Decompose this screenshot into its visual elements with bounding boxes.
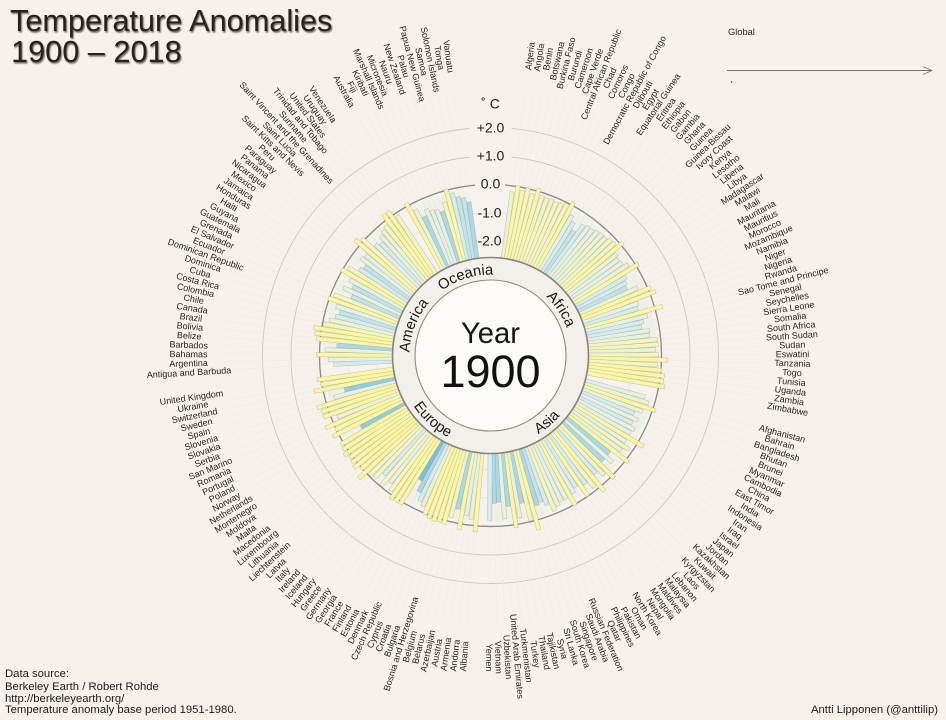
Asia bars and country labels: Oman xyxy=(629,605,650,631)
Asia bars and country labels: Tajikistan xyxy=(545,632,562,670)
Oceania bars and country labels: Solomon Islands xyxy=(419,26,442,94)
global data point xyxy=(731,81,732,83)
Oceania bars and country labels: Tonga xyxy=(432,45,446,71)
Africa bars and country labels: Madagascar xyxy=(719,171,766,207)
Asia bars and country labels: North Korea xyxy=(630,590,664,637)
data source note: http://berkeleyearth.org/ xyxy=(5,693,125,705)
Africa bars and country labels: Zambia xyxy=(774,393,805,407)
Africa bars and country labels: Guinea xyxy=(688,125,715,153)
axis labels: 0.0 xyxy=(481,176,500,192)
Africa bars and country labels: Lesotho xyxy=(710,153,742,180)
Europe bars and country labels: Estonia xyxy=(338,607,361,638)
Africa bars and country labels: Democratic Republic of Congo xyxy=(601,34,668,146)
Europe bars and country labels: Bulgaria xyxy=(382,624,402,658)
Europe bars and country labels: Bosnia and Herzegovina xyxy=(382,596,420,692)
Africa bars and country labels: Mauritania xyxy=(736,198,777,227)
axis labels: -2.0 xyxy=(477,232,502,248)
Africa bars and country labels: Uganda xyxy=(774,384,807,398)
Europe bars and country labels: Cyprus xyxy=(365,619,385,650)
central hub ring xyxy=(392,258,588,454)
Asia bars and country labels xyxy=(484,366,806,700)
Europe bars and country labels: Iceland xyxy=(283,573,310,601)
America bars and country labels: Ecuador xyxy=(192,235,226,257)
Africa bars and country labels: Angola xyxy=(532,43,546,72)
Europe bars and country labels: Norway xyxy=(211,490,243,514)
Africa bars and country labels: Botswana xyxy=(548,41,566,81)
Europe bars and country labels: United Kingdom xyxy=(159,388,224,407)
Africa bars and country labels: South Africa xyxy=(766,319,816,334)
America bars and country labels: Nicaragua xyxy=(230,157,269,190)
America bars and country labels: Antigua and Barbuda xyxy=(146,365,231,380)
America bars and country labels: Grenada xyxy=(198,217,234,241)
Africa bars and country labels: Morocco xyxy=(747,217,783,241)
global timeline arrow xyxy=(727,66,932,74)
Africa bars and country labels: Tanzania xyxy=(774,358,811,369)
Asia bars and country labels: Bhutan xyxy=(759,450,789,470)
Africa bars and country labels: Ghana xyxy=(682,119,707,146)
Europe bars and country labels: Slovenia xyxy=(183,433,219,452)
Africa bars and country labels: Djibouti xyxy=(631,79,655,110)
America bars and country labels: Honduras xyxy=(214,182,253,211)
Asia bars and country labels: Indonesia xyxy=(726,503,764,532)
Africa bars and country labels: Benin xyxy=(541,47,555,71)
Africa bars and country labels: Namibia xyxy=(755,235,789,257)
Africa bars and country labels: Seychelles xyxy=(765,290,810,308)
America bars and country labels: Belize xyxy=(177,330,202,342)
America bars and country labels: Saint Lucia xyxy=(261,120,299,159)
Asia bars and country labels: Pakistan xyxy=(619,605,644,640)
Europe bars and country labels: Denmark xyxy=(346,608,371,646)
America bars and country labels: Canada xyxy=(176,301,209,316)
Asia bars and country labels: Saudi Arabia xyxy=(584,612,611,664)
Oceania bars and country labels: Samoa xyxy=(413,47,429,77)
America bars and country labels: Saint Kitts and Nevis xyxy=(240,113,307,178)
Europe bars and country labels: Montenegro xyxy=(213,501,259,535)
Oceania bars and country labels: Nauru xyxy=(377,59,395,85)
Europe bars and country labels: Finland xyxy=(330,603,353,634)
Africa bars and country labels: Somalia xyxy=(773,310,807,324)
Africa bars and country labels: Mali xyxy=(742,196,762,213)
America bars and country labels: Mexico xyxy=(229,169,258,194)
Asia bars and country labels: Bahrain xyxy=(763,433,796,452)
Asia bars and country labels: Qatar xyxy=(605,619,624,643)
Africa bars and country labels: Ivory Coast xyxy=(694,133,735,171)
America bars and country labels: Barbados xyxy=(169,339,209,351)
Europe bars and country labels: Azerbaijan xyxy=(418,629,437,673)
label: Africa: Africa xyxy=(546,292,573,328)
Africa bars and country labels: Sudan xyxy=(779,340,805,350)
America bars and country labels: Panama xyxy=(239,152,271,181)
Africa bars and country labels: Central African Republic xyxy=(579,27,624,121)
Oceania bars and country labels xyxy=(331,25,488,309)
America bars and country labels: Bahamas xyxy=(169,349,208,359)
year value: 1900 xyxy=(440,346,541,397)
Asia bars and country labels: Israel xyxy=(718,530,741,551)
Asia bars and country labels: Singapore xyxy=(577,620,600,662)
Europe bars and country labels: Hungary xyxy=(289,576,318,609)
America bars and country labels: Colombia xyxy=(176,281,215,299)
America bars and country labels: Haiti xyxy=(219,196,239,213)
Asia bars and country labels: Kyrgyzstan xyxy=(679,555,717,594)
Asia bars and country labels: South Korea xyxy=(568,619,592,669)
Africa bars and country labels: Congo xyxy=(616,72,637,100)
Africa bars and country labels: Eritrea xyxy=(654,96,678,123)
Europe bars and country labels: Greece xyxy=(298,583,324,613)
Europe bars and country labels: Liechtenstein xyxy=(247,540,292,583)
Asia bars and country labels: Japan xyxy=(711,536,736,559)
Africa bars and country labels: Eswatini xyxy=(776,349,809,359)
America bars and country labels: Venezuela xyxy=(307,84,339,125)
Asia bars and country labels: China xyxy=(746,484,772,504)
Asia bars and country labels: Uzbekistan xyxy=(501,635,514,680)
Africa bars and country labels: South Sudan xyxy=(766,329,818,342)
title xyxy=(10,3,332,69)
label: Oceania: Oceania xyxy=(438,264,494,289)
Europe bars and country labels: Poland xyxy=(207,483,237,505)
label: Asia: Asia xyxy=(536,412,560,434)
Africa bars and country labels: Zimbabwe xyxy=(766,401,809,418)
Europe bars and country labels: Lithuania xyxy=(246,539,280,570)
Asia bars and country labels: Laos xyxy=(681,570,702,592)
title: Temperature Anomalies xyxy=(10,3,332,38)
Oceania bars and country labels: Fiji xyxy=(345,80,359,94)
Africa bars and country labels: Sao Tome and Principe xyxy=(737,265,829,297)
America bars and country labels: Dominica xyxy=(183,253,222,274)
Asia bars and country labels: Jordan xyxy=(704,542,731,567)
Oceania bars and country labels: Kiribati xyxy=(350,68,371,97)
America bars and country labels: Argentina xyxy=(169,358,208,369)
Europe bars and country labels: Belarus xyxy=(410,632,427,665)
Asia bars and country labels: United Arab Emirates xyxy=(508,614,526,700)
Asia bars and country labels: Sri Lanka xyxy=(561,627,581,666)
Africa bars and country labels: Comoros xyxy=(606,63,631,100)
Africa bars and country labels: Malawi xyxy=(733,185,762,208)
Oceania bars and country labels: Palau xyxy=(395,54,412,79)
author credit: Antti Lipponen (@anttilip) xyxy=(811,704,938,716)
America bars and country labels: Paraguay xyxy=(243,143,279,176)
Africa bars and country labels: Mauritius xyxy=(742,208,780,233)
Oceania bars and country labels: Vanuatu xyxy=(441,39,456,73)
Asia bars and country labels: India xyxy=(739,501,761,519)
Africa bars and country labels: Egypt xyxy=(640,87,661,112)
America bars and country labels: Suriname xyxy=(277,109,310,145)
Europe bars and country labels: Moldova xyxy=(224,512,258,539)
Oceania bars and country labels: Papua New Guinea xyxy=(397,25,427,103)
Asia bars and country labels: Vietnam xyxy=(493,641,504,674)
Europe bars and country labels: Romania xyxy=(196,465,233,489)
Europe bars and country labels: Czech Republic xyxy=(349,600,384,662)
Africa bars and country labels: Niger xyxy=(763,246,787,263)
Africa bars and country labels: Gabon xyxy=(668,107,693,134)
America bars and country labels: Chile xyxy=(183,292,205,306)
Asia bars and country labels: Philippines xyxy=(609,605,637,649)
Asia bars and country labels: Turkey xyxy=(528,640,542,669)
Europe bars and country labels: Slovakia xyxy=(186,441,222,461)
America bars and country labels: Jamaica xyxy=(222,175,255,202)
Europe bars and country labels: Ukraine xyxy=(177,399,209,414)
Europe bars and country labels: Belgium xyxy=(401,630,419,664)
Europe bars and country labels: Andorra xyxy=(448,639,462,672)
Europe bars and country labels: Armenia xyxy=(438,637,453,671)
Asia bars and country labels: Yemen xyxy=(484,644,494,671)
Africa bars and country labels: Mozambique xyxy=(743,223,794,252)
Europe bars and country labels: Macedonia xyxy=(231,523,272,558)
Africa bars and country labels: Libya xyxy=(725,171,749,191)
Asia bars and country labels: Cambodia xyxy=(742,472,784,499)
Africa bars and country labels: Burundi xyxy=(566,49,584,82)
Europe bars and country labels: Netherlands xyxy=(208,493,255,527)
Europe bars and country labels: Malta xyxy=(234,522,258,544)
Africa bars and country labels: Kenya xyxy=(707,147,733,171)
axis labels: +2.0 xyxy=(477,120,505,136)
title: 1900 – 2018 xyxy=(11,34,182,69)
Europe bars and country labels: Austria xyxy=(429,638,444,667)
Europe bars and country labels: Albania xyxy=(458,641,470,672)
Oceania bars and country labels: Micronesia xyxy=(365,53,390,98)
America bars and country labels: Bolivia xyxy=(176,320,204,333)
Asia bars and country labels: Bangladesh xyxy=(753,439,801,464)
Asia bars and country labels: Brunei xyxy=(757,459,784,478)
Asia bars and country labels: Iraq xyxy=(726,524,744,542)
America bars and country labels: Saint Vincent and the Grenadines xyxy=(237,80,336,186)
Europe bars and country labels: Germany xyxy=(304,585,333,622)
data source note: Data source: xyxy=(5,668,69,680)
Africa bars and country labels: Sierra Leone xyxy=(763,299,815,317)
America bars and country labels: Guatemala xyxy=(198,206,242,235)
data source note: Temperature anomaly base period 1951-1980. xyxy=(5,704,237,716)
Asia bars and country labels: Malaysia xyxy=(663,576,692,610)
America bars and country labels xyxy=(146,80,457,380)
label: America: America xyxy=(400,300,429,352)
Asia bars and country labels: Kuwait xyxy=(692,555,718,582)
Asia bars and country labels: Lebanon xyxy=(670,570,700,603)
America bars and country labels: El Salvador xyxy=(189,224,236,251)
Europe bars and country labels: Spain xyxy=(186,426,211,441)
Europe bars and country labels: Latvia xyxy=(264,556,288,580)
Europe bars and country labels: Sweden xyxy=(180,416,214,433)
axis labels xyxy=(477,96,505,248)
Asia bars and country labels: Turkmenistan xyxy=(518,628,534,683)
Europe bars and country labels: France xyxy=(322,599,345,628)
Africa bars and country labels: Senegal xyxy=(768,282,803,299)
Asia bars and country labels: Afghanistan xyxy=(758,423,806,445)
Asia bars and country labels: Syria xyxy=(555,638,570,660)
Africa bars and country labels: Algeria xyxy=(523,42,537,71)
Asia bars and country labels: East Timor xyxy=(733,487,776,517)
America bars and country labels: Brazil xyxy=(179,311,203,324)
radial chart xyxy=(146,25,829,700)
Asia bars and country labels: Thailand xyxy=(536,635,552,671)
Africa bars and country labels: Guinea-Bissau xyxy=(683,122,732,170)
Europe bars and country labels: Switzerland xyxy=(171,406,218,425)
America bars and country labels: Peru xyxy=(257,142,277,163)
Europe bars and country labels xyxy=(159,361,489,692)
America bars and country labels: Trinidad and Tobago xyxy=(271,86,330,156)
Europe bars and country labels: Serbia xyxy=(193,451,221,469)
Europe bars and country labels: Croatia xyxy=(374,623,393,653)
data source note xyxy=(5,668,237,716)
label: Europe: Europe xyxy=(414,400,450,436)
Europe bars and country labels: Luxembourg xyxy=(235,528,280,567)
America bars and country labels: Guyana xyxy=(208,201,241,224)
Africa bars and country labels: Liberia xyxy=(718,162,745,186)
Africa bars and country labels: Ethiopia xyxy=(659,99,687,131)
Africa bars and country labels: Cameroon xyxy=(573,47,595,90)
Asia bars and country labels: Kazakhstan xyxy=(691,542,732,581)
Africa bars and country labels: Equatorial Guinea xyxy=(634,72,682,137)
year caption: Year xyxy=(461,317,520,350)
Asia bars and country labels: Nepal xyxy=(644,596,666,621)
Africa bars and country labels: Cape Verde xyxy=(580,47,605,95)
Asia bars and country labels: Myanmar xyxy=(748,465,786,489)
Asia bars and country labels: Mongolia xyxy=(648,586,677,621)
America bars and country labels: Cuba xyxy=(188,264,212,280)
Africa bars and country labels: Burkina Faso xyxy=(555,36,578,90)
Africa bars and country labels: Tunisia xyxy=(777,376,806,388)
chart rings xyxy=(262,118,718,584)
Asia bars and country labels: Iran xyxy=(731,517,749,534)
America bars and country labels: United States xyxy=(287,91,328,140)
Europe bars and country labels: Ireland xyxy=(277,567,302,594)
Europe bars and country labels: Portugal xyxy=(201,474,235,497)
America bars and country labels: Uruguay xyxy=(301,93,329,127)
America bars and country labels: Costa Rica xyxy=(175,271,220,291)
axis labels: +1.0 xyxy=(477,148,505,164)
Europe bars and country labels: Georgia xyxy=(313,593,339,625)
global panel heading: Global xyxy=(728,27,755,37)
Africa bars and country labels: Nigeria xyxy=(763,254,793,273)
Asia bars and country labels: Russian Federation xyxy=(587,597,626,672)
Africa bars and country labels: Rwanda xyxy=(764,263,798,282)
Asia bars and country labels: Maldives xyxy=(656,581,685,616)
axis labels: -1.0 xyxy=(477,204,502,220)
axis labels: ˚ C xyxy=(481,96,500,112)
Africa bars and country labels xyxy=(494,27,829,418)
Europe bars and country labels: Italy xyxy=(273,565,292,584)
Oceania bars and country labels: Marshall Islands xyxy=(351,47,387,111)
hub inner disc xyxy=(415,280,566,431)
Oceania bars and country labels: Australia xyxy=(331,74,357,109)
America bars and country labels: Dominican Republic xyxy=(166,237,246,273)
Africa bars and country labels: Gambia xyxy=(674,112,702,142)
Europe bars and country labels: San Marino xyxy=(187,455,234,482)
data source note: Berkeley Earth / Robert Rohde xyxy=(5,681,159,693)
Africa bars and country labels: Chad xyxy=(601,66,619,90)
Africa bars and country labels: Togo xyxy=(782,367,802,378)
Oceania bars and country labels: New Zealand xyxy=(382,42,408,96)
